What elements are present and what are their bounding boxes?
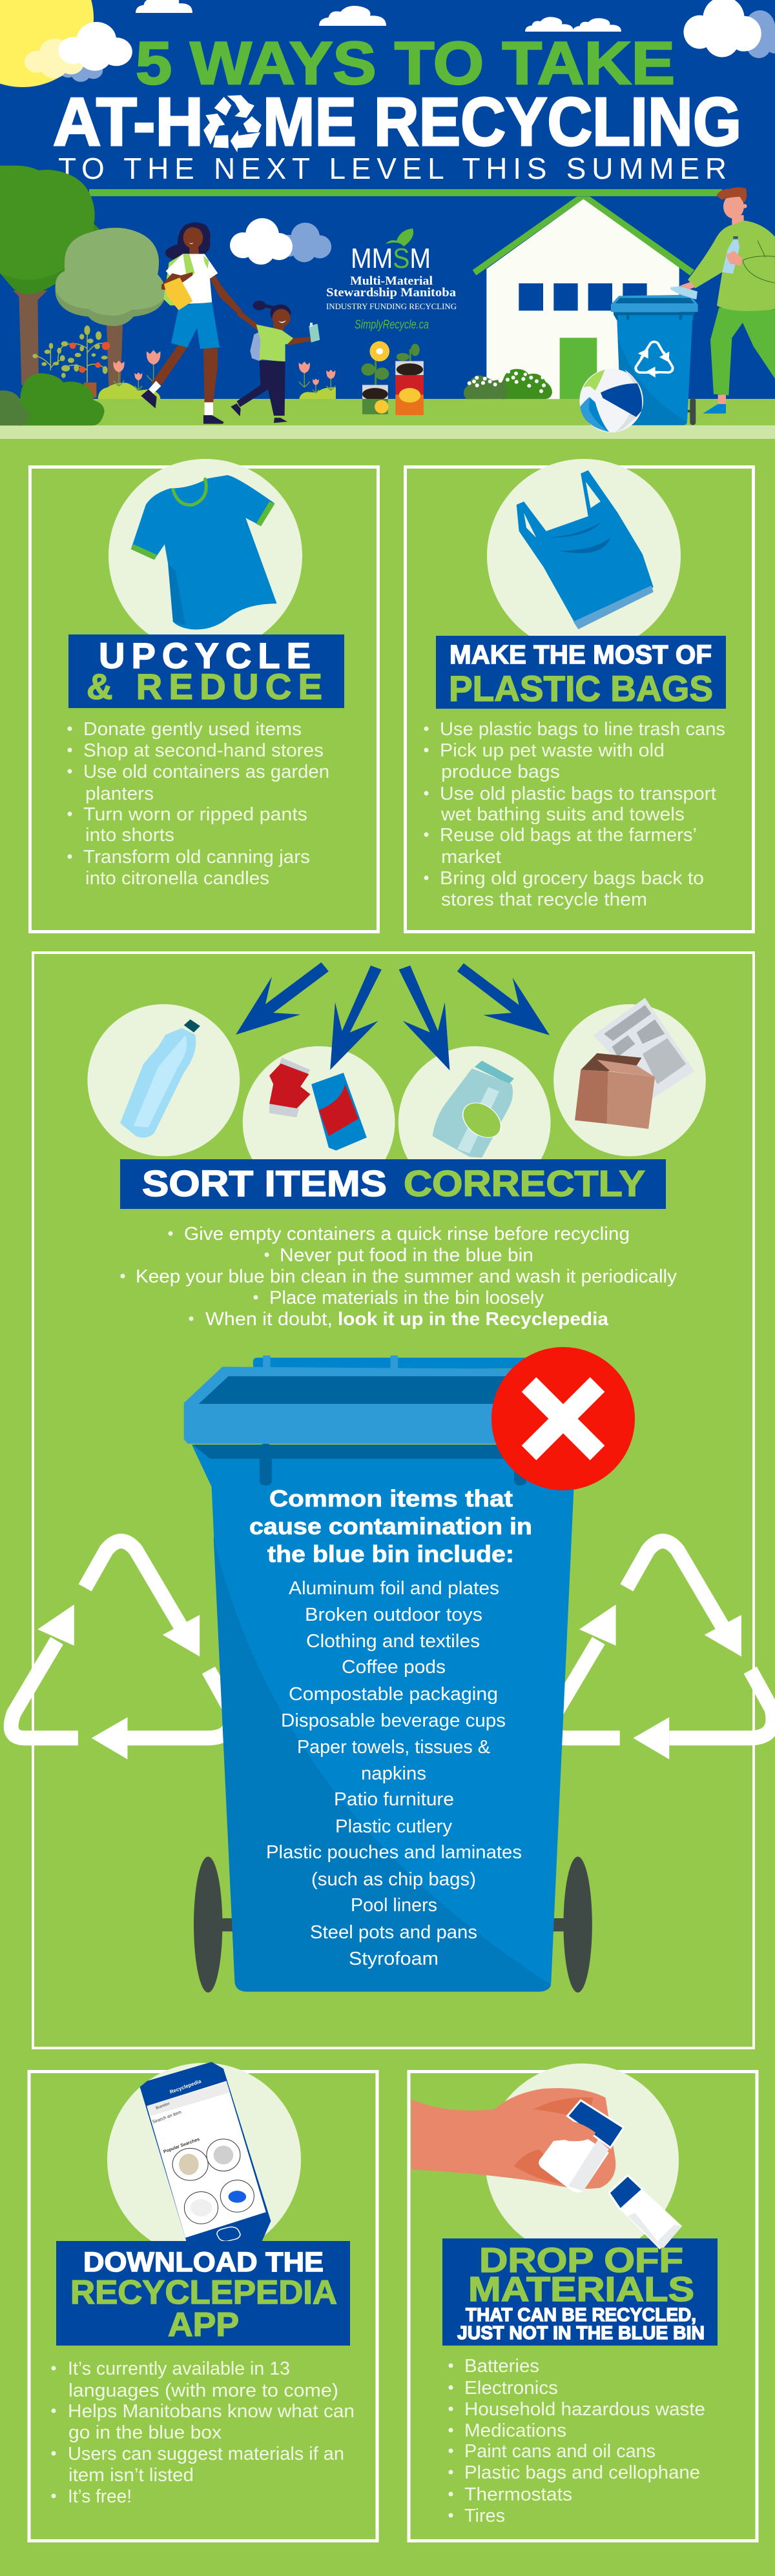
icon: phone with app: Recyclepedia	[169, 2078, 202, 2095]
tips list: Pick up pet waste with old	[440, 740, 665, 761]
bin body shading	[214, 1537, 551, 1992]
flowering shrubs	[464, 369, 552, 399]
tips list: Use old containers as garden	[83, 762, 329, 782]
tips list: Place materials in the bin loosely	[269, 1288, 544, 1308]
child with bottle	[231, 301, 320, 423]
icon: left recycling triangle	[11, 1541, 231, 1760]
tips list: produce bags	[441, 762, 560, 782]
under-lid shadow	[192, 1445, 576, 1459]
tips list	[52, 2358, 355, 2507]
blue bin with recycling symbol	[611, 282, 698, 425]
icon: hand dropping packages	[411, 2088, 682, 2249]
icon: glass jar	[433, 1060, 514, 1158]
icon: plastic bottle	[120, 1019, 200, 1138]
logo: Stewardship Manitoba	[326, 286, 457, 299]
contamination list: Clothing and textiles	[306, 1631, 480, 1652]
panel: download the recyclepedia app	[29, 2062, 377, 2541]
tips list: Transform old canning jars	[83, 847, 310, 867]
top clouds	[136, 0, 621, 32]
tips list	[67, 719, 329, 889]
circle: bottle	[87, 1004, 240, 1156]
man with bottle	[688, 187, 775, 414]
lawn	[0, 399, 775, 426]
heading subtext line two: JUST NOT IN THE BLUE BIN	[457, 2323, 705, 2344]
contamination list: Patio furniture	[334, 1789, 454, 1810]
circle: jar	[398, 1046, 551, 1199]
clouds near sun	[25, 22, 132, 82]
tips list: Helps Manitobans know what can	[68, 2401, 355, 2422]
tips list: into citronella candles	[85, 868, 269, 889]
logo	[326, 228, 457, 332]
trees and bushes	[0, 166, 336, 399]
lime bushes	[98, 383, 160, 399]
contamination list: Compostable packaging	[289, 1684, 498, 1705]
tips list: market	[441, 847, 501, 867]
icon: newspaper and box	[575, 998, 694, 1129]
icon: right recycling triangle	[553, 1541, 773, 1760]
icon: recycling symbol on bin	[629, 341, 679, 382]
panel border	[406, 467, 753, 932]
wheels	[194, 1857, 592, 1993]
package two	[620, 2189, 682, 2249]
icon circles and items	[87, 962, 706, 1199]
heading text: SORT ITEMS	[142, 1163, 387, 1204]
tips list: Turn worn or ripped pants	[83, 804, 307, 825]
contamination list: Coffee pods	[342, 1657, 446, 1678]
title line two: AT-H	[53, 84, 203, 160]
tips list: Users can suggest materials if an	[68, 2444, 344, 2464]
heading text: DOWNLOAD THE	[83, 2247, 324, 2278]
recycling arrows behind bin	[11, 1541, 773, 1760]
heading text green: RECYCLEPEDIA	[70, 2274, 337, 2311]
materials list: Tires	[464, 2506, 505, 2526]
contamination heading: Common items that	[269, 1485, 513, 1512]
icon: cans	[269, 1058, 367, 1150]
tips list: Donate gently used items	[83, 719, 302, 740]
tips list: stores that recycle them	[441, 889, 647, 910]
logo: SimplyRecycle.ca	[355, 318, 429, 332]
materials list: Plastic bags and cellophane	[464, 2462, 700, 2483]
illustration circle	[107, 2063, 301, 2257]
panel: sort items correctly	[11, 953, 773, 2048]
heading banner	[436, 636, 726, 709]
header background	[0, 0, 775, 399]
tips list: wet bathing suits and towels	[440, 804, 685, 825]
tips list: When it doubt,	[205, 1309, 333, 1330]
materials list: Medications	[464, 2420, 566, 2441]
panel border	[30, 467, 378, 932]
tips list: It’s free!	[68, 2486, 132, 2507]
right cloud	[683, 0, 775, 58]
materials list: Batteries	[464, 2356, 539, 2377]
header scene	[0, 0, 775, 439]
tips list: item isn’t listed	[68, 2465, 194, 2486]
panel: upcycle and reduce	[30, 459, 378, 932]
contamination list: Plastic cutlery	[335, 1816, 453, 1837]
heading text green line two: MATERIALS	[468, 2270, 694, 2309]
icon: leaf	[386, 228, 413, 247]
tips list: Give empty containers a quick rinse before recycling	[184, 1224, 630, 1244]
tips list: into shorts	[85, 825, 174, 846]
heading text: MAKE THE MOST OF	[450, 640, 712, 669]
package one	[539, 2138, 609, 2193]
icon: phone with app	[140, 2062, 271, 2246]
hand	[411, 2088, 615, 2189]
panel border	[33, 953, 754, 2048]
bin body	[192, 1445, 576, 1992]
heading text green line three: APP	[168, 2306, 239, 2344]
tips list: planters	[85, 784, 154, 804]
logo: Multi-Material	[350, 274, 433, 288]
contamination list: Paper towels, tissues &	[297, 1737, 490, 1758]
contamination list: Plastic pouches and laminates	[266, 1842, 522, 1863]
contamination heading	[249, 1485, 532, 1567]
icon: white X	[529, 1384, 597, 1453]
tips list: It’s currently available in 13	[68, 2358, 290, 2379]
tips list: Never put food in the blue bin	[280, 1245, 533, 1266]
heading text green: PLASTIC BAGS	[449, 668, 713, 709]
arrow: to paper	[457, 963, 550, 1035]
tomato plant and flowers	[0, 325, 335, 425]
illustration circle	[487, 459, 681, 653]
title line two: ME RECYCLING	[263, 84, 741, 160]
arrow: to cans	[330, 966, 382, 1070]
contamination heading: cause contamination in	[249, 1513, 532, 1539]
mid sky cloud	[230, 218, 331, 265]
icon: recycling symbol as the letter O	[203, 95, 262, 152]
contamination list: Pool liners	[351, 1895, 437, 1916]
tips list: Shop at second-hand stores	[83, 740, 324, 761]
planter cans	[361, 341, 424, 415]
contamination list: (such as chip bags)	[311, 1869, 476, 1890]
contamination list: Broken outdoor toys	[305, 1605, 482, 1625]
panel: drop off materials	[409, 2064, 757, 2541]
tips list: look it up in the Recyclepedia	[338, 1309, 609, 1330]
contamination list: Disposable beverage cups	[281, 1710, 506, 1731]
logo: INDUSTRY FUNDING RECYCLING	[326, 301, 457, 311]
arrow: to bottle	[236, 962, 329, 1035]
sun	[0, 0, 94, 87]
materials list	[448, 2356, 705, 2526]
tips list	[424, 719, 725, 910]
heading text: UPCYCLE	[99, 635, 311, 676]
heading subtext: THAT CAN BE RECYCLED,	[466, 2305, 696, 2326]
tips list: Keep your blue bin clean in the summer and wash it periodically	[136, 1266, 677, 1287]
panel border	[29, 2072, 377, 2541]
circle: paper and box	[553, 1004, 706, 1156]
icon: phone with app: Brandon	[156, 2102, 170, 2111]
icon: phone with app: Search an item	[152, 2110, 182, 2125]
materials list: Household hazardous waste	[464, 2399, 705, 2420]
dropped bottle	[670, 282, 698, 299]
front bushes	[19, 373, 105, 425]
heading text green: DROP OFF	[479, 2241, 683, 2280]
bin lid	[184, 1367, 534, 1444]
tips list: Bring old grocery bags back to	[440, 868, 704, 889]
title line three: TO THE NEXT LEVEL THIS SUMMER	[58, 152, 727, 185]
materials list: Electronics	[464, 2378, 558, 2399]
blue bin	[184, 1355, 592, 1993]
green rule	[89, 189, 722, 196]
title line two	[53, 84, 741, 160]
beach ball	[579, 369, 643, 432]
tips list	[120, 1224, 677, 1330]
contamination list: napkins	[361, 1763, 426, 1784]
materials list: Thermostats	[464, 2484, 572, 2505]
heading text green: CORRECTLY	[404, 1163, 645, 1204]
woman with bag	[141, 223, 243, 424]
logo: MMSM	[351, 243, 431, 274]
icon: phone with app: Popular Searches	[163, 2137, 200, 2155]
pale path strip	[0, 425, 775, 439]
heading banner	[120, 1159, 666, 1209]
arrow: to jar	[399, 966, 450, 1070]
panel: plastic bags	[406, 459, 753, 932]
house	[473, 196, 694, 399]
contamination list: Steel pots and pans	[310, 1922, 477, 1943]
icon: t-shirt	[131, 475, 277, 629]
circle: cans	[243, 1046, 395, 1199]
tips list: go in the blue box	[68, 2422, 222, 2443]
tips list: Use old plastic bags to transport	[440, 784, 716, 804]
heading banner	[68, 634, 344, 708]
heading banner	[56, 2241, 350, 2346]
icon: plastic bag	[517, 470, 654, 629]
tips list: Use plastic bags to line trash cans	[440, 719, 725, 740]
contamination heading: the blue bin include:	[267, 1541, 514, 1567]
contamination list: Aluminum foil and plates	[289, 1578, 499, 1599]
heading banner	[442, 2238, 718, 2346]
contamination list	[266, 1578, 522, 1969]
illustration circle	[485, 2064, 679, 2257]
illustration circle	[108, 459, 302, 653]
panel border	[409, 2072, 757, 2541]
tips list: Reuse old bags at the farmers’	[440, 825, 697, 846]
tips list: languages (with more to come)	[68, 2380, 338, 2401]
materials list: Paint cans and oil cans	[464, 2441, 656, 2462]
no symbol: red circle	[491, 1347, 635, 1490]
contamination list: Styrofoam	[349, 1949, 439, 1969]
rear lid rail	[253, 1358, 530, 1368]
title line one: 5 WAYS TO TAKE	[136, 29, 675, 97]
heading text green: & REDUCE	[87, 666, 322, 707]
